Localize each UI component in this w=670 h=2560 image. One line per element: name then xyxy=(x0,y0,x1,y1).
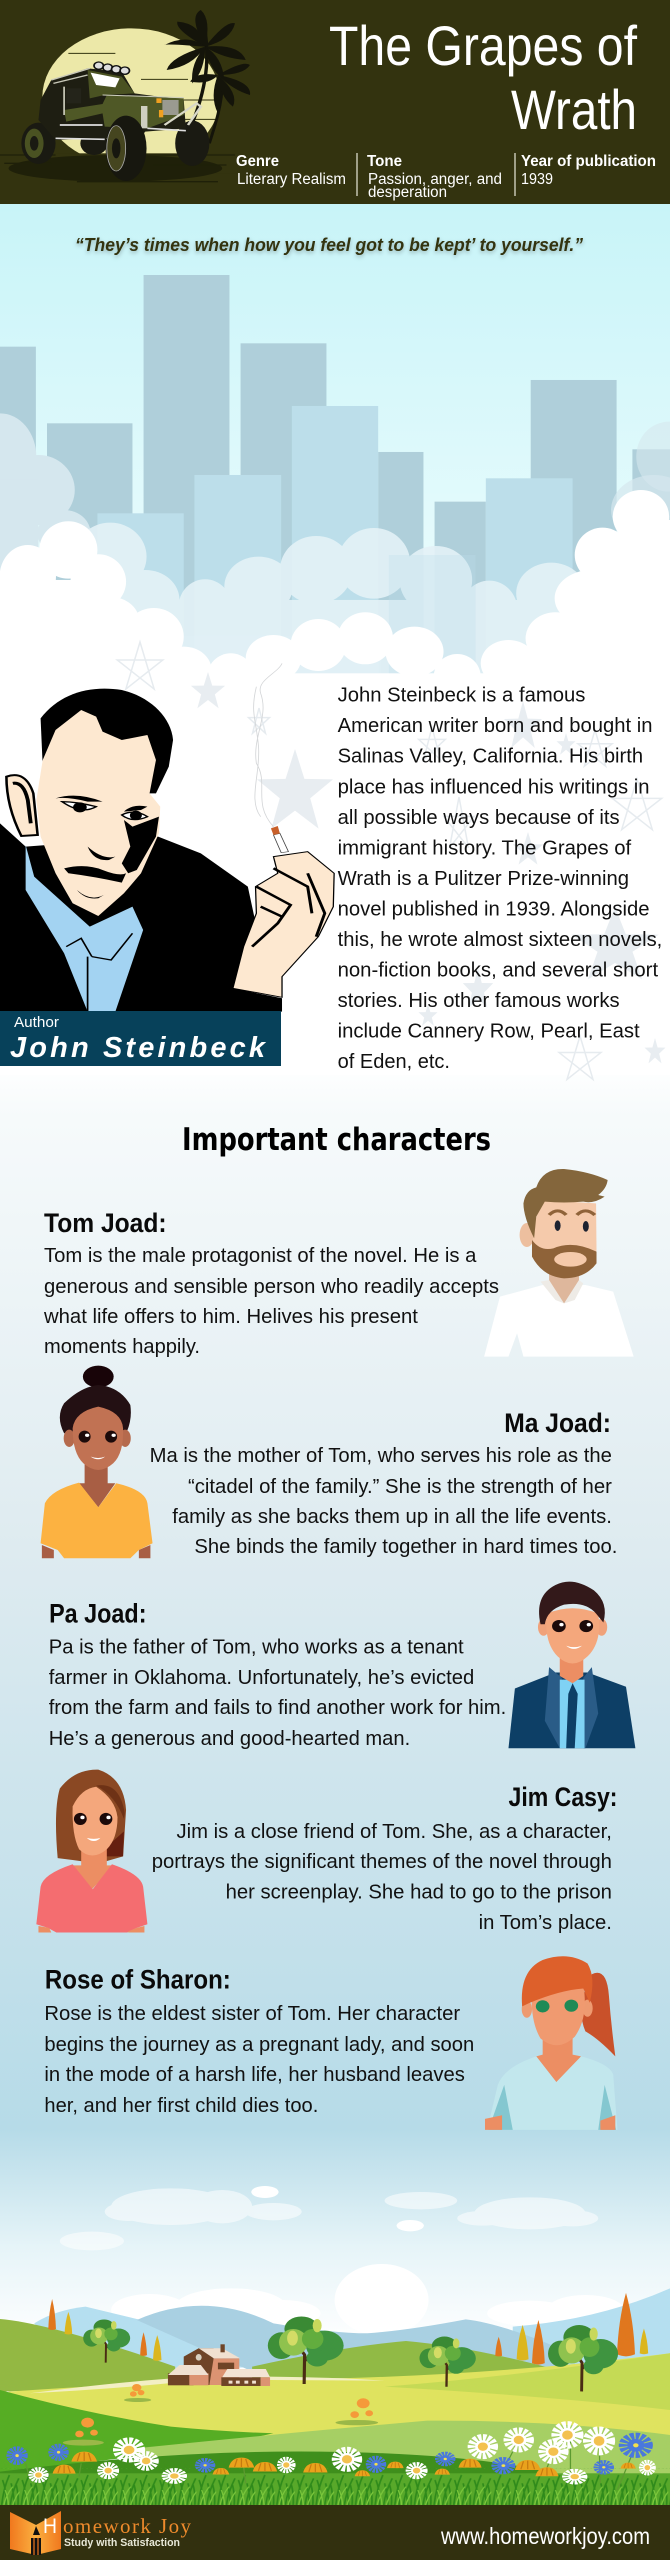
Pa Joad description: from the farm and fails to find another work for him. xyxy=(49,1696,506,1719)
portrait of John Steinbeck xyxy=(0,663,334,1012)
author biography: American writer born and bought in xyxy=(338,714,652,737)
Jim Casy name: Jim Casy: xyxy=(508,1782,618,1812)
author biography: John Steinbeck is a famous xyxy=(338,684,585,707)
Pa Joad description xyxy=(49,1636,506,1750)
back buildings xyxy=(0,275,670,680)
character: Ma Joad xyxy=(41,1366,617,1558)
Rose of Sharon description: in the mode of a harsh life, her husband leaves xyxy=(44,2063,465,2086)
illustration: jeep, sun and palm trees xyxy=(0,10,250,182)
Rose of Sharon description: begins the journey as a pregnant lady, and soon xyxy=(44,2033,474,2056)
middle clouds xyxy=(74,523,611,680)
character: Pa Joad xyxy=(49,1582,635,1750)
quote: “They’s times when how you feel got to be kept’ to yourself.” xyxy=(75,234,584,255)
Jim Casy description: portrays the significant themes of the novel through xyxy=(152,1850,612,1873)
Jim Casy description: her screenplay. She had to go to the prison xyxy=(226,1880,612,1904)
Pa Joad name: Pa Joad: xyxy=(49,1598,146,1628)
Jim Casy description: Jim is a close friend of Tom. She, as a character, xyxy=(176,1820,612,1843)
author name band xyxy=(0,1011,281,1066)
brand name xyxy=(43,2514,192,2549)
Pa Joad description: farmer in Oklahoma. Unfortunately, he’s evicted xyxy=(49,1666,474,1689)
year of publication: Year of publication xyxy=(521,153,656,170)
tone: desperation xyxy=(368,184,447,201)
author biography xyxy=(338,684,662,1073)
tone: Tone xyxy=(367,153,402,170)
author biography: non-fiction books, and several short xyxy=(338,958,658,981)
horizon clouds xyxy=(111,2288,624,2327)
jeep xyxy=(21,62,209,181)
title: Wrath xyxy=(511,78,637,141)
Tom Joad name: Tom Joad: xyxy=(44,1208,167,1238)
author biography: immigrant history. The Grapes of xyxy=(338,836,631,859)
author name band: John Steinbeck xyxy=(10,1032,267,1064)
Ma Joad name: Ma Joad: xyxy=(504,1408,611,1438)
author section xyxy=(0,663,662,1073)
title xyxy=(329,14,637,141)
Tom Joad description: moments happily. xyxy=(44,1335,200,1358)
Ma Joad description xyxy=(150,1444,617,1558)
genre: Genre xyxy=(236,153,279,170)
Ma Joad description: “citadel of the family.” She is the strength of her xyxy=(188,1475,612,1498)
Ma Joad description: family as she backs them up in all the life events. xyxy=(172,1505,612,1528)
mountains xyxy=(34,2307,265,2373)
page background xyxy=(0,204,670,2130)
farmhouse xyxy=(168,2344,270,2386)
genre: Literary Realism xyxy=(237,171,346,188)
brand name: H xyxy=(43,2515,57,2538)
tone xyxy=(367,153,502,201)
front buildings xyxy=(97,406,573,680)
brand name: omework Joy xyxy=(63,2514,192,2538)
Rose of Sharon name: Rose of Sharon: xyxy=(45,1965,231,1995)
city skyline with clouds xyxy=(0,275,670,700)
Jim Casy description: in Tom’s place. xyxy=(479,1911,612,1934)
author biography: stories. His other famous works xyxy=(338,989,620,1012)
character: Tom Joad xyxy=(43,1169,634,1358)
Ma Joad illustration xyxy=(41,1366,153,1558)
Jim Casy illustration xyxy=(36,1770,147,1932)
sun xyxy=(335,2264,429,2336)
Rose of Sharon description xyxy=(44,2002,474,2117)
character: Jim Casy xyxy=(36,1770,618,1934)
hills xyxy=(252,2341,551,2378)
author biography: all possible ways because of its xyxy=(338,806,620,829)
Rose of Sharon description: her, and her first child dies too. xyxy=(44,2094,318,2117)
author biography: Salinas Valley, California. His birth xyxy=(338,745,643,768)
back clouds xyxy=(0,413,670,580)
Tom Joad description: what life offers to him. Helives his present xyxy=(43,1305,418,1328)
trees xyxy=(83,2316,618,2391)
Rose of Sharon illustration xyxy=(485,1956,617,2130)
foreground flowers xyxy=(10,2425,653,2490)
year of publication xyxy=(521,153,656,188)
author biography: of Eden, etc. xyxy=(338,1050,450,1073)
decorative stars xyxy=(117,642,665,1079)
poplar trees xyxy=(48,2293,648,2365)
author biography: place has influenced his writings in xyxy=(338,775,650,798)
Tom Joad description xyxy=(43,1244,499,1358)
genre xyxy=(236,153,346,188)
Pa Joad description: He’s a generous and good-hearted man. xyxy=(49,1727,410,1750)
author biography: this, he wrote almost sixteen novels, xyxy=(338,928,662,951)
heading: important characters: Important characters xyxy=(182,1122,491,1158)
tone: Passion, anger, and xyxy=(368,171,502,188)
Rose of Sharon description: Rose is the eldest sister of Tom. Her character xyxy=(44,2002,460,2025)
logo: open book with pencil xyxy=(10,2511,61,2555)
Jim Casy description xyxy=(152,1820,612,1934)
brand name: Study with Satisfaction xyxy=(64,2537,180,2549)
Tom Joad illustration xyxy=(484,1169,634,1357)
Tom Joad description: Tom is the male protagonist of the novel. He is a xyxy=(44,1244,477,1267)
small orange flowers xyxy=(63,2384,378,2446)
sky clouds xyxy=(60,2188,598,2250)
Ma Joad description: Ma is the mother of Tom, who serves his role as the xyxy=(150,1444,612,1467)
Pa Joad illustration xyxy=(508,1582,635,1748)
front clouds xyxy=(0,490,670,700)
Ma Joad description: She binds the family together in hard times too. xyxy=(194,1535,617,1558)
landscape illustration xyxy=(0,2130,670,2505)
Pa Joad description: Pa is the father of Tom, who works as a tenant xyxy=(49,1636,464,1659)
author biography: Wrath is a Pulitzer Prize-winning xyxy=(338,867,629,890)
Tom Joad description: generous and sensible person who readily accepts xyxy=(44,1275,499,1298)
year of publication: 1939 xyxy=(521,171,553,188)
header band xyxy=(0,0,670,204)
author name band: Author xyxy=(14,1014,59,1031)
author biography: novel published in 1939. Alongside xyxy=(338,897,650,920)
character: Rose of Sharon xyxy=(44,1956,617,2130)
footer band xyxy=(0,2505,670,2560)
author biography: include Cannery Row, Pearl, East xyxy=(338,1019,640,1042)
